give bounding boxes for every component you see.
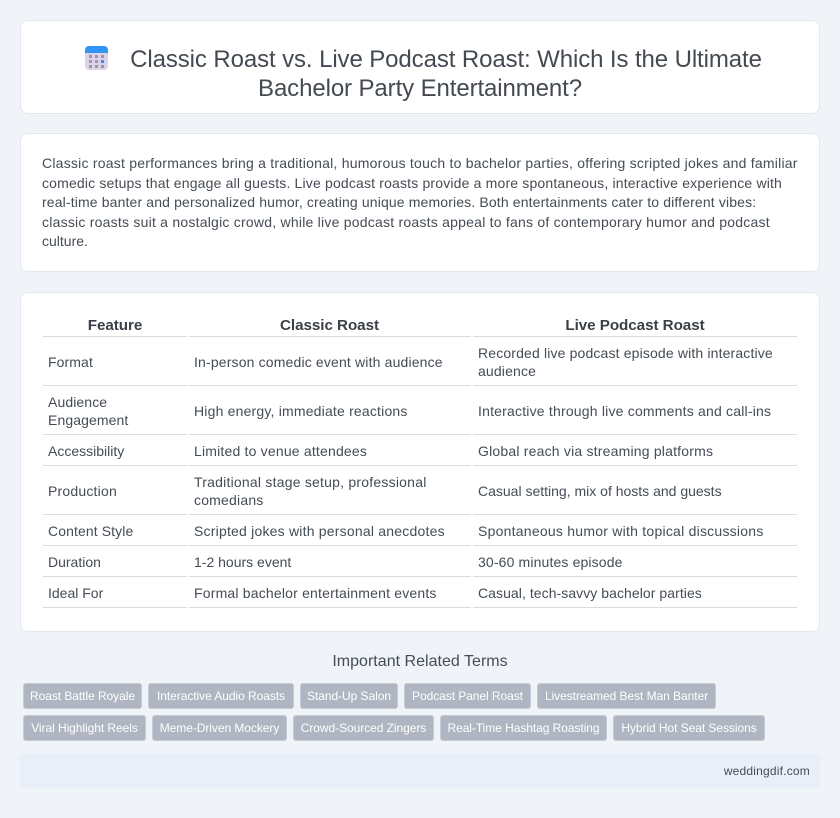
row: Production: Production bbox=[48, 483, 117, 499]
tags: related terms bbox=[23, 683, 765, 741]
row: Content Style bbox=[48, 523, 764, 539]
row: Ideal For: Casual, tech-savvy bachelor parties bbox=[478, 585, 702, 601]
icon: calendar bbox=[85, 46, 108, 70]
panel: comparison table bbox=[20, 292, 820, 632]
tags: related terms: Podcast Panel Roast bbox=[412, 689, 523, 703]
row: Production: Casual setting, mix of hosts and guests bbox=[478, 483, 722, 499]
text: introduction paragraph: Classic roast performances bring a traditional, humorous touch to bachelor parties, offering scripted jokes and familiar bbox=[42, 155, 798, 171]
tags: related terms: Stand-Up Salon bbox=[307, 689, 391, 703]
panel: introduction bbox=[20, 133, 820, 272]
row: Audience Engagement: Engagement bbox=[48, 412, 128, 428]
row: Production bbox=[48, 474, 722, 508]
table header bbox=[88, 317, 705, 334]
text: introduction paragraph: comedic setups that engage all guests. Live podcast roasts provide a more spontaneous, interactive experience with bbox=[42, 175, 782, 191]
tags: related terms: Viral Highlight Reels bbox=[31, 721, 138, 735]
tags: related terms: Real-Time Hashtag Roasting bbox=[447, 721, 600, 735]
heading: related terms: Important Related Terms bbox=[332, 653, 508, 670]
table header: Feature bbox=[88, 317, 142, 334]
tags: related terms: Hybrid Hot Seat Sessions bbox=[621, 721, 757, 735]
row: Format: audience bbox=[478, 363, 536, 379]
row: Content Style: Spontaneous humor with topical discussions bbox=[478, 523, 764, 539]
heading: title: Bachelor Party Entertainment? bbox=[258, 75, 582, 102]
row: Accessibility: Accessibility bbox=[48, 443, 124, 459]
tags: related terms: Meme-Driven Mockery bbox=[160, 721, 279, 735]
heading: title bbox=[130, 46, 762, 102]
row: Format: In-person comedic event with audience bbox=[194, 354, 443, 370]
row: Duration: 30-60 minutes episode bbox=[478, 554, 623, 570]
text: introduction paragraph: classic roasts suit a nostalgic crowd, while live podcast roasts appeal to fans of contemporary humor and podcast bbox=[42, 214, 770, 230]
tags: related terms: Crowd-Sourced Zingers bbox=[301, 721, 426, 735]
table header: Live Podcast Roast bbox=[565, 317, 705, 334]
heading: title: Classic Roast vs. Live Podcast Roast: Which Is the Ultimate bbox=[130, 46, 762, 73]
row: Duration: 1-2 hours event bbox=[194, 554, 291, 570]
row: Ideal For: Formal bachelor entertainment events bbox=[194, 585, 437, 601]
row: Audience Engagement bbox=[48, 394, 771, 428]
tags: related terms: Roast Battle Royale bbox=[30, 689, 135, 703]
row: Ideal For bbox=[48, 585, 702, 601]
row: Audience Engagement: Interactive through live comments and call-ins bbox=[478, 403, 771, 419]
row: Content Style: Scripted jokes with personal anecdotes bbox=[194, 523, 445, 539]
row: Audience Engagement: Audience bbox=[48, 394, 107, 410]
row: Format: Recorded live podcast episode with interactive bbox=[478, 345, 773, 361]
row: Production: Traditional stage setup, professional bbox=[194, 474, 427, 490]
tags: related terms: Interactive Audio Roasts bbox=[157, 689, 285, 703]
row: Format bbox=[48, 345, 773, 379]
row: Duration bbox=[48, 554, 623, 570]
row: Accessibility: Limited to venue attendees bbox=[194, 443, 367, 459]
row: Accessibility: Global reach via streaming platforms bbox=[478, 443, 713, 459]
table header: Classic Roast bbox=[280, 317, 379, 334]
panel: title header bbox=[20, 20, 820, 114]
row: Ideal For: Ideal For bbox=[48, 585, 103, 601]
text: source: weddingdif.com bbox=[724, 764, 810, 778]
row: Audience Engagement: High energy, immediate reactions bbox=[194, 403, 408, 419]
row: Production: comedians bbox=[194, 492, 264, 508]
tags: related terms: Livestreamed Best Man Banter bbox=[545, 689, 708, 703]
row: Format: Format bbox=[48, 354, 93, 370]
row: Duration: Duration bbox=[48, 554, 101, 570]
footer bar bbox=[20, 754, 820, 788]
text: introduction paragraph: culture. bbox=[42, 233, 88, 249]
text: introduction paragraph: real-time banter and personalized humor, creating unique memories. Both entertainments cater to different vibes: bbox=[42, 194, 756, 210]
row: Content Style: Content Style bbox=[48, 523, 133, 539]
row: Accessibility bbox=[48, 443, 713, 459]
text: introduction paragraph bbox=[42, 155, 798, 249]
